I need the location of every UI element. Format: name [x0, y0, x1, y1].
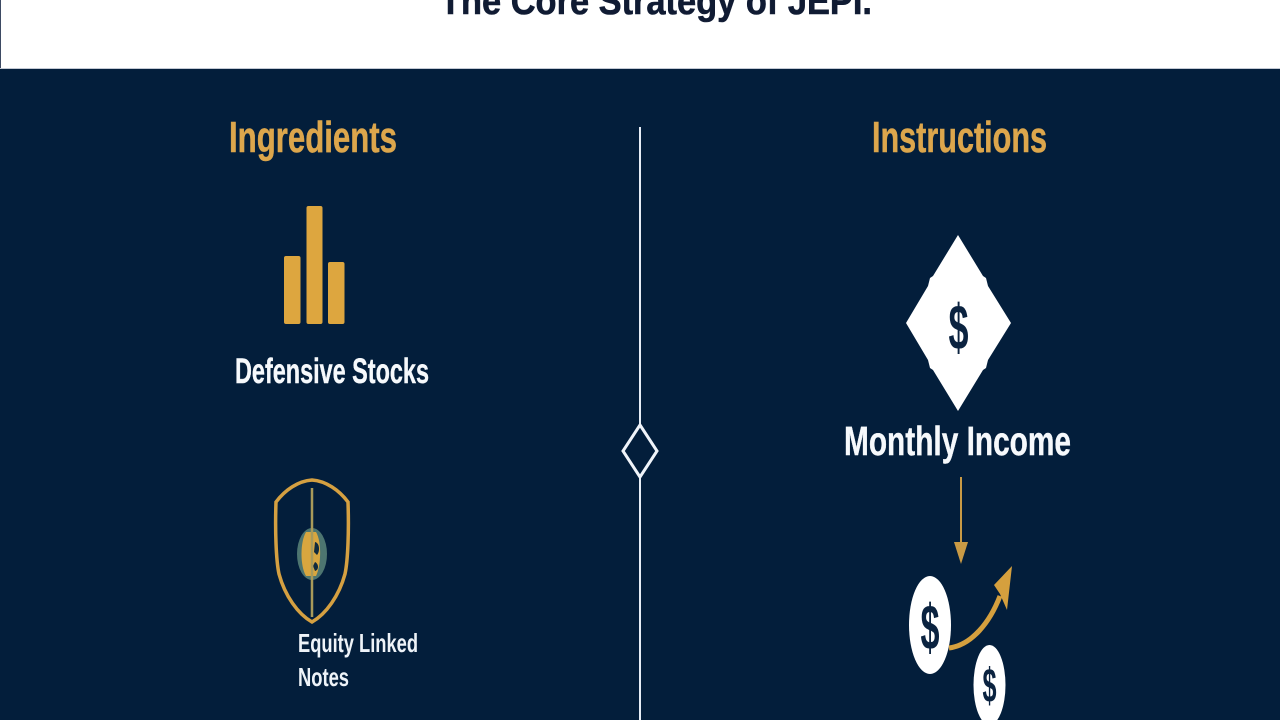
icon: white diamond with dollar: $	[948, 291, 968, 363]
heading: ingredients: Ingredients	[229, 113, 397, 162]
icon: white diamond with dollar	[906, 235, 1011, 411]
label: equity linked notes: Equity Linked	[298, 628, 418, 658]
icon: large dollar coin	[909, 576, 951, 674]
label: monthly income: Monthly Income	[844, 418, 1071, 464]
icon: shield with dollar coin	[276, 480, 348, 622]
icon: bar chart	[284, 206, 344, 324]
icon: small dollar coin: $	[982, 660, 997, 713]
heading: instructions: Instructions	[872, 113, 1047, 162]
arrow: curved up	[949, 566, 1012, 648]
label: equity linked notes	[298, 628, 418, 692]
divider with diamond	[623, 127, 657, 720]
header band	[0, 0, 1280, 69]
arrow: down	[954, 477, 968, 564]
label: equity linked notes: Notes	[298, 662, 349, 692]
icon: large dollar coin: $	[920, 591, 940, 663]
label: defensive stocks: Defensive Stocks	[235, 352, 429, 391]
icon: small dollar coin	[974, 645, 1006, 720]
